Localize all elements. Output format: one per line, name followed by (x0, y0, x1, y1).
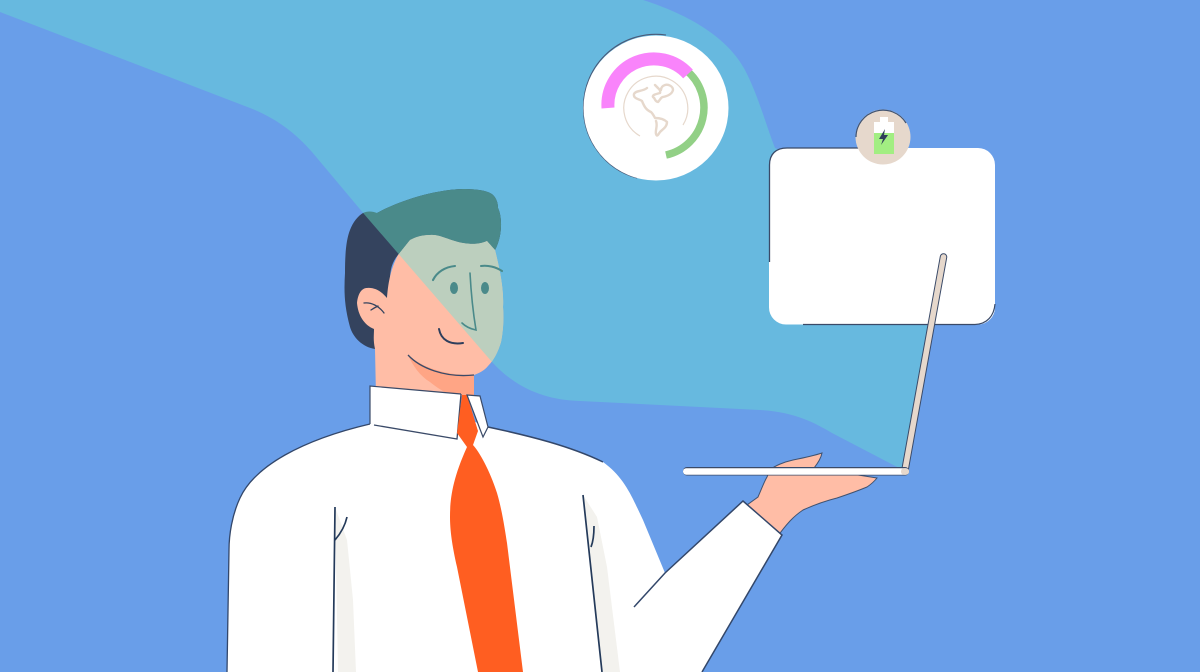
smile (439, 329, 463, 343)
eyes (450, 282, 458, 294)
necktie (450, 395, 523, 672)
globe badge (583, 34, 728, 181)
face tinted by the beam (360, 189, 503, 366)
lightning bolt (879, 129, 888, 145)
right collar flap (467, 395, 488, 437)
white info panel (769, 148, 995, 324)
light beam from laptop (0, 0, 945, 470)
neck shadow (408, 355, 474, 396)
continents (634, 85, 673, 135)
battery icon (880, 117, 888, 122)
laptop (683, 257, 944, 476)
green progress ring (666, 70, 704, 155)
eyebrows (433, 266, 502, 280)
ear detail (364, 303, 384, 313)
left sleeve fold (335, 507, 356, 672)
shirt collar (370, 386, 461, 439)
face and neck (357, 235, 503, 396)
battery badge (856, 110, 910, 164)
laptop base (683, 467, 909, 476)
man: torso and shirt (227, 420, 782, 672)
right sleeve fold (583, 495, 620, 672)
man: neck and head (345, 189, 503, 396)
jaw line (408, 355, 474, 376)
hair (345, 189, 501, 349)
laptop screen edge (905, 257, 944, 470)
nose (462, 273, 476, 330)
shirt outlines (227, 424, 370, 672)
pink progress ring (608, 59, 688, 108)
hand (740, 453, 877, 540)
globe outline (624, 76, 688, 136)
